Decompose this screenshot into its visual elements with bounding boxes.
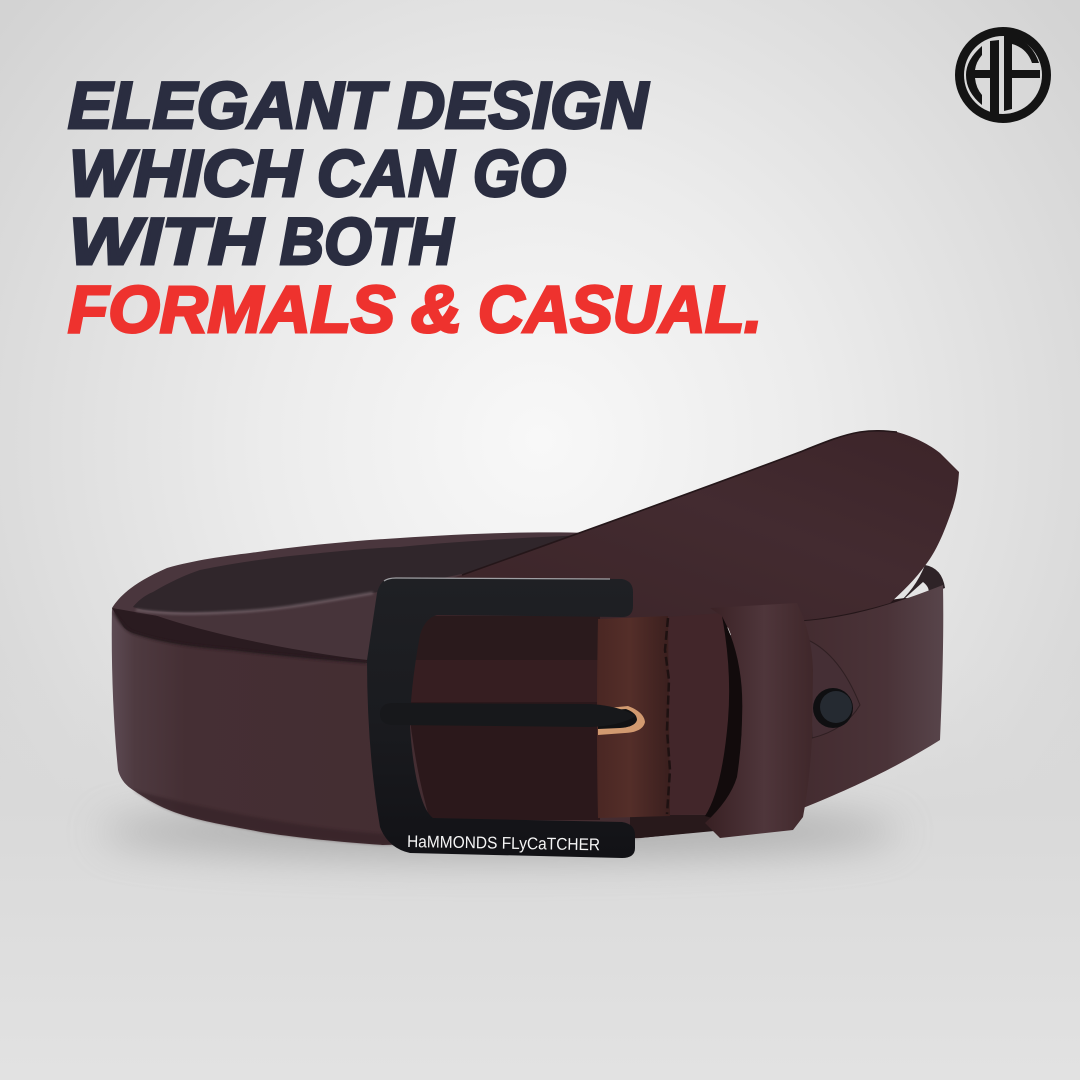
buckle frame	[367, 578, 635, 858]
heading line 2: WHICH	[69, 136, 302, 210]
heading line 1: ELEGANT	[68, 68, 389, 142]
heading line 2	[69, 136, 566, 210]
strap layer highlight	[136, 593, 373, 614]
dark band under keeper	[630, 815, 730, 838]
inner lining	[133, 535, 590, 613]
logo	[960, 32, 1046, 118]
heading line 2: GO	[473, 136, 566, 210]
upper strap edge	[462, 431, 897, 575]
heading line 1: DESIGN	[398, 68, 649, 142]
back rim of belt loop	[112, 532, 600, 680]
stud tab	[808, 640, 860, 738]
heading line 3	[69, 204, 454, 278]
seam filler	[112, 608, 367, 672]
heading line 3: BOTH	[280, 204, 454, 278]
heading line 4: CASUAL.	[478, 272, 762, 346]
buckle branding: HaMMONDS FLyCaTCHER	[407, 832, 600, 854]
heading line 3: WITH	[69, 204, 265, 278]
heading line 1	[68, 68, 649, 142]
buckle pin	[380, 703, 636, 727]
main front strap	[112, 585, 943, 845]
strap lower shade	[133, 790, 640, 845]
belt hole	[562, 629, 590, 657]
gap behind tip	[903, 582, 929, 600]
leather loop	[705, 603, 813, 838]
floor shadow	[100, 806, 900, 858]
heading line 2: CAN	[317, 136, 455, 210]
shadow under free end	[790, 598, 930, 635]
heading	[68, 68, 762, 346]
leather seen through buckle	[408, 616, 600, 820]
second strap layer	[133, 570, 620, 680]
heading line 4: &	[411, 272, 462, 346]
stitched keeper	[597, 613, 742, 822]
belt	[100, 431, 959, 858]
heading line 4	[68, 272, 762, 346]
heading line 4: FORMALS	[68, 272, 395, 346]
free strap end	[400, 431, 959, 640]
stud	[813, 688, 853, 728]
buckle top glint	[384, 578, 610, 581]
tip back rim	[895, 565, 945, 606]
strap top seam	[114, 612, 367, 663]
